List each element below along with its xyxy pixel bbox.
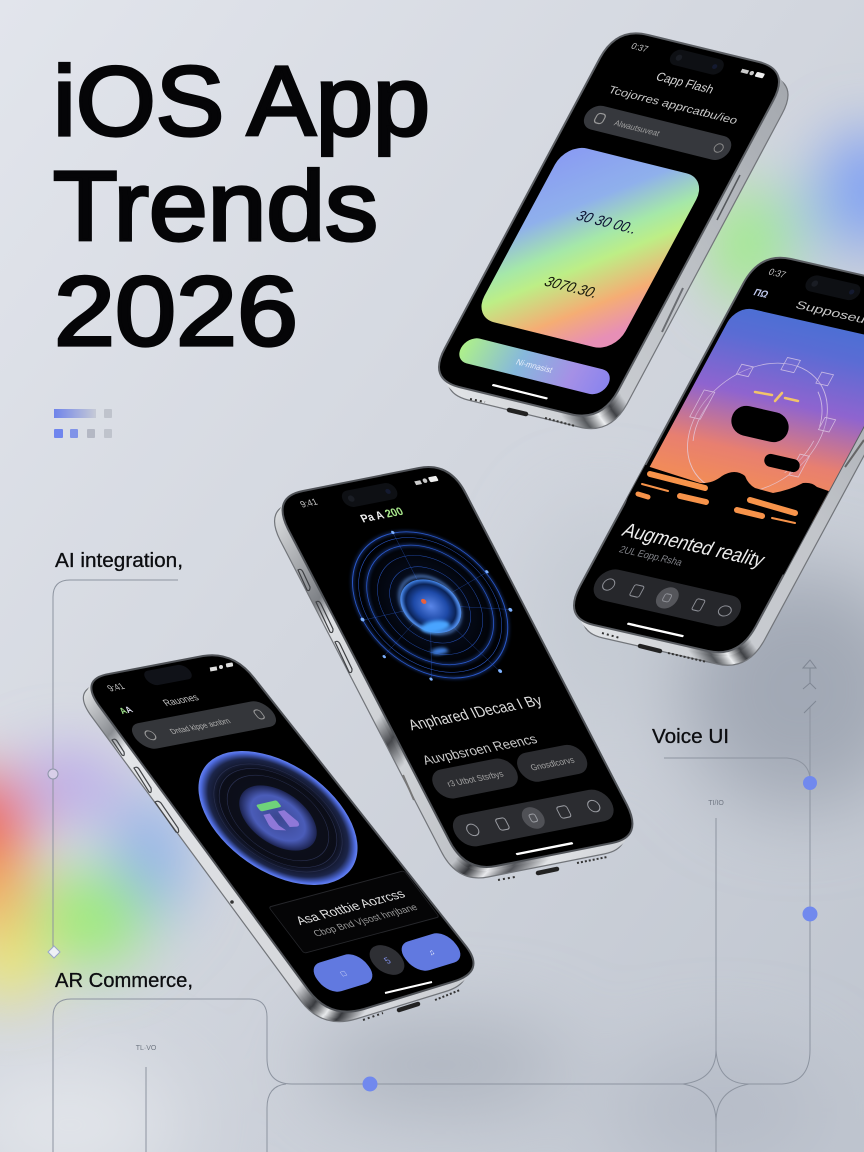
app logo: ΠΩ — [751, 287, 770, 301]
status icons — [210, 662, 233, 671]
phone body — [442, 37, 788, 429]
phone details: ports and buttons — [298, 569, 607, 880]
phone details: ports and buttons — [112, 739, 460, 1020]
AI orb graphic — [322, 516, 541, 693]
small line caption right: TI/IO — [708, 800, 724, 807]
app heading: Supposeuntice — [793, 299, 864, 334]
title: 2026 — [54, 256, 298, 366]
node: voice dot upper — [803, 776, 817, 790]
home bar — [515, 842, 574, 855]
screen content — [443, 35, 775, 411]
home bar — [492, 384, 548, 400]
phone: AI orb (centre) — [275, 467, 632, 880]
phone: augmented reality (right) — [574, 258, 864, 665]
button left — [307, 951, 379, 995]
status card: Cbop Bnd Vjsost hnrjbane — [311, 902, 420, 938]
subheadline: Auvpbsroen Reencs — [420, 731, 540, 768]
status bar — [768, 268, 860, 300]
logo: AA — [117, 705, 135, 716]
voice orb — [166, 738, 390, 898]
app icon — [254, 799, 302, 833]
node: commerce dot — [362, 1076, 378, 1092]
status bar: 9:41 — [298, 497, 319, 509]
phone body — [275, 471, 629, 878]
action pill — [454, 336, 615, 397]
home bar — [627, 622, 684, 637]
node: diamond — [48, 946, 60, 958]
tab bar — [594, 569, 741, 626]
phone body — [577, 262, 864, 665]
heading: Capp Flash — [654, 69, 717, 96]
title — [53, 46, 430, 366]
node: AI integration ring — [48, 769, 58, 779]
gradient card: 3070.30. — [541, 274, 601, 302]
AR ring — [687, 357, 836, 490]
AR scene panel — [638, 306, 864, 529]
search pill — [126, 699, 282, 751]
status bar: 0:37 — [629, 41, 650, 54]
button centre — [363, 942, 411, 978]
screen content — [285, 472, 627, 864]
screen content — [579, 262, 864, 646]
action pill: Ni-mnasist — [514, 358, 555, 375]
search pill: Dntad klppe acnbrn — [168, 717, 233, 736]
AR subheading: 2UL Eopp.Rsha — [617, 544, 685, 569]
chips: r3 Utbot Stsrbys — [445, 769, 505, 789]
button centre: 5 — [382, 956, 393, 966]
notch — [141, 664, 195, 686]
label: AI integration: AI integration, — [55, 550, 183, 572]
phone: gradient wallet (top) — [439, 33, 788, 429]
status card: Asa Rottbie Aozrcss — [293, 887, 408, 928]
chips: Gnosdlcorvs — [528, 755, 576, 773]
phone details: ports and buttons — [470, 175, 740, 426]
button left: □ — [338, 969, 349, 978]
title: iOS App — [53, 46, 430, 156]
button right: ♫ — [426, 948, 437, 957]
arrow marker — [803, 660, 816, 713]
connector lines network — [53, 580, 810, 1152]
gradient card — [473, 143, 708, 352]
title: Trends — [53, 151, 378, 261]
home bar — [385, 982, 432, 993]
tab bar — [447, 787, 620, 849]
phone: voice orb (bottom left) — [83, 655, 473, 1022]
chips — [427, 742, 593, 801]
search pill: Alwautsuveat — [612, 119, 662, 138]
screen content: Tcojorres apprcatbu/ieo — [606, 84, 740, 127]
status bar — [628, 38, 767, 86]
search pill — [579, 103, 736, 162]
gradient card: 30 30 00.. — [573, 208, 640, 238]
status bar: 0:37 — [767, 267, 788, 280]
button right — [395, 930, 467, 974]
AR heading: Augmented reality — [618, 519, 769, 572]
label: Voice UI: Voice UI — [652, 726, 729, 748]
rainbow glow: top right — [708, 130, 864, 303]
status time: 9:41 — [105, 681, 127, 693]
legend blocks — [54, 409, 112, 438]
status bar — [298, 473, 443, 516]
status card — [269, 871, 439, 953]
app heading: Pa A 200 — [359, 506, 406, 525]
headline: Anphared IDecaa I By — [405, 692, 546, 734]
small line caption left: TL·VO — [136, 1045, 157, 1052]
phone details: ports and buttons — [602, 440, 864, 662]
rainbow glow: left — [0, 751, 186, 999]
label: AR Commerce: AR Commerce, — [55, 970, 193, 992]
app heading: Rauones — [161, 693, 202, 709]
phone body — [83, 659, 470, 1022]
node: voice dot lower — [802, 906, 818, 922]
AR silhouette and shapes — [620, 392, 840, 580]
